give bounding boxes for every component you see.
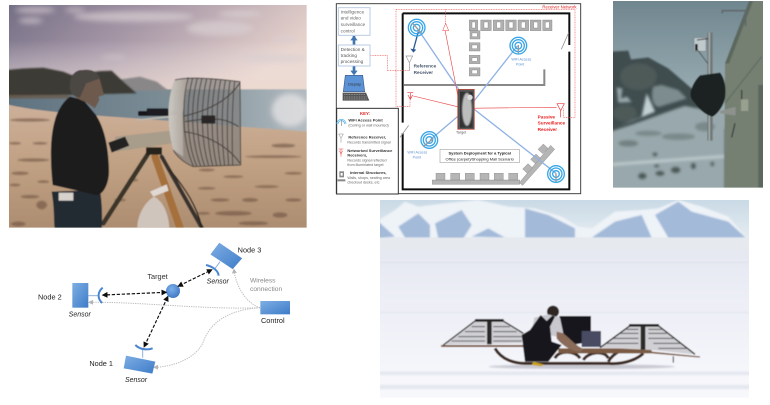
wall bracket [720, 107, 736, 116]
grid dish antenna [169, 77, 241, 167]
diagram: WiFi passive radar deployment: Point [516, 63, 524, 67]
node 1 [89, 345, 155, 384]
photo: man with grid antenna on a beach [6, 2, 310, 231]
receiver network label: Receiver Network [542, 5, 577, 10]
icon: display computer: Display [348, 82, 361, 87]
hanging bag [137, 197, 169, 228]
labels: Reference [414, 63, 437, 68]
wireless connection links [90, 270, 260, 367]
control boxes: and video [341, 16, 361, 21]
key panel: Networked Surveillance [347, 148, 393, 153]
key panel: Internal Structures, [350, 170, 387, 175]
diagram: WiFi passive radar deployment: WiFi Access [511, 58, 531, 62]
black covered dish [690, 73, 726, 117]
man kneeling [522, 306, 583, 366]
key panel: KEY: [360, 111, 371, 116]
sea [6, 89, 310, 133]
sky [380, 200, 749, 238]
sledge shadow [488, 364, 675, 369]
node 2: Sensor [69, 312, 91, 319]
left wing antenna [443, 319, 523, 345]
node 2: Node 2 [38, 292, 62, 301]
diagram frame [336, 4, 581, 194]
photo: antenna mast in a snowy valley [610, 0, 766, 191]
deployment caption: System Deployment for a Typical [448, 151, 511, 156]
snow field [377, 250, 752, 402]
target figure [456, 89, 474, 135]
concrete building [724, 1, 766, 191]
diagram: WiFi passive radar deployment: WiFi Access [407, 150, 427, 154]
ice haze [377, 238, 752, 250]
key panel: (Ceiling or wall mounted) [348, 124, 389, 128]
key panel: WiFi Access Point [348, 117, 383, 122]
deployment caption [440, 149, 519, 163]
mast [707, 32, 713, 141]
key panel: Records signal reflected [347, 159, 387, 163]
target figure: Target [456, 131, 466, 135]
building walls [403, 13, 569, 189]
icon: display computer [343, 75, 369, 101]
valley snow and rocks [610, 63, 725, 191]
control boxes [338, 8, 370, 75]
labels: Receiver [538, 127, 557, 132]
node 3 [206, 243, 261, 286]
sand footprints [9, 118, 302, 226]
labels: Surveillance [538, 121, 566, 126]
surveillance and reference antennas [406, 56, 564, 117]
diagram: multistatic node network [38, 243, 290, 384]
blue signal paths [417, 28, 556, 173]
red reflected paths and reference arrow [410, 23, 557, 108]
labels [414, 63, 566, 132]
control boxes: surveillance [341, 22, 366, 27]
right wing antenna [600, 324, 695, 363]
target: Target [147, 272, 168, 281]
control box [260, 301, 290, 325]
black equipment case [559, 316, 591, 345]
node 3: Node 3 [238, 246, 261, 255]
snowy hillside [610, 51, 725, 191]
deployment caption: Office (carpet)/Shopping Mall Scenario [445, 156, 515, 161]
checkout counters [432, 144, 555, 185]
control boxes: tracking [341, 53, 357, 58]
bracket top [722, 11, 746, 26]
photo: antenna sledge on snowfield [377, 197, 752, 402]
control boxes: Intelligence [341, 9, 365, 14]
wireless connection label [250, 277, 282, 293]
key panel: Receivers, [347, 153, 367, 158]
control boxes: Detection & [341, 47, 366, 52]
key panel: checkout desks, etc [347, 181, 380, 185]
receiver network dashed links [370, 9, 575, 117]
antenna boom [115, 130, 172, 152]
key panel: Walls, shops, seating area [347, 176, 391, 180]
control boxes: control [341, 28, 355, 33]
labels: Receiver [414, 70, 433, 75]
key panel: from illuminated target [347, 163, 384, 167]
foggy sky [613, 1, 763, 129]
target [147, 272, 180, 298]
control box: Control [261, 316, 285, 325]
man silhouette [52, 190, 102, 231]
diagram: WiFi passive radar deployment: Point [413, 155, 421, 159]
clouds [15, 7, 307, 62]
wireless connection label: Wireless [250, 277, 276, 284]
square panel antenna [694, 38, 708, 63]
target to sensor arrows [104, 270, 211, 346]
wireless connection label: connection [250, 286, 282, 293]
tripod [103, 153, 202, 228]
key panel: Records transmitted signal [347, 140, 391, 144]
distant and near hills [117, 77, 168, 91]
node 1: Sensor [125, 377, 148, 384]
sky [6, 2, 310, 92]
icons: WiFi access points [408, 19, 564, 182]
sand [6, 104, 310, 231]
distant mountains [377, 200, 747, 238]
key panel [337, 108, 398, 194]
diagram: WiFi passive radar deployment [336, 4, 581, 194]
sledge runners [495, 348, 643, 364]
rifle scope [137, 108, 170, 121]
node 1: Node 1 [89, 359, 113, 368]
labels: Passive [538, 114, 555, 119]
node 2 [38, 283, 103, 319]
node 3: Sensor [207, 279, 229, 286]
shop units [469, 20, 552, 76]
key panel: Reference Receiver, [348, 134, 386, 139]
control boxes: processing [341, 59, 364, 64]
